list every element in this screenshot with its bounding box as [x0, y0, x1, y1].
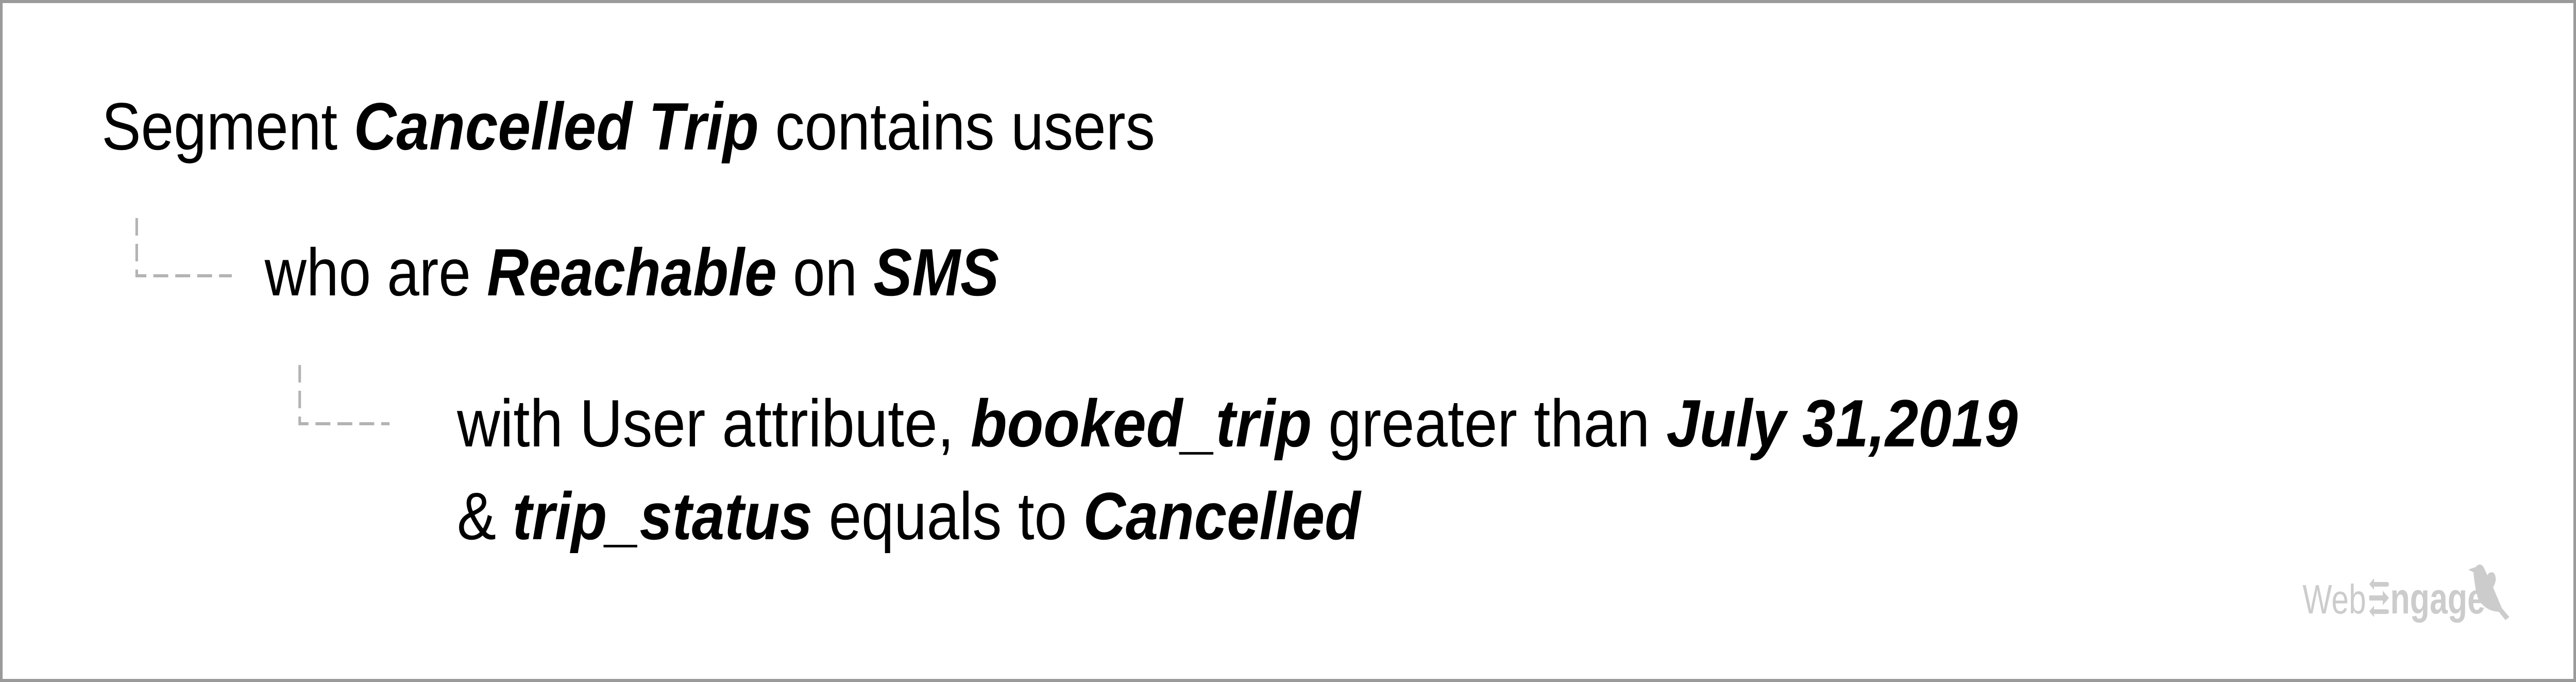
connector: level 1 [137, 218, 232, 276]
icon: arrow E [2369, 578, 2389, 617]
text: attribute conditions [456, 386, 2018, 554]
logo: WebEngage: Web [2302, 576, 2366, 622]
heading: segment line: Segment Cancelled Trip contains users [101, 89, 1155, 164]
text: attribute conditions: & trip_status equals to Cancelled [457, 479, 1362, 554]
connector: level 2 [300, 365, 389, 424]
logo: WebEngage [2302, 564, 2510, 623]
icon: bird [2468, 564, 2510, 620]
logo: WebEngage: ngage [2390, 574, 2485, 623]
text: attribute conditions: with User attribute, booked_trip greater than July 31,2019 [456, 386, 2018, 461]
text: reachable on SMS: who are Reachable on SMS [264, 235, 999, 310]
